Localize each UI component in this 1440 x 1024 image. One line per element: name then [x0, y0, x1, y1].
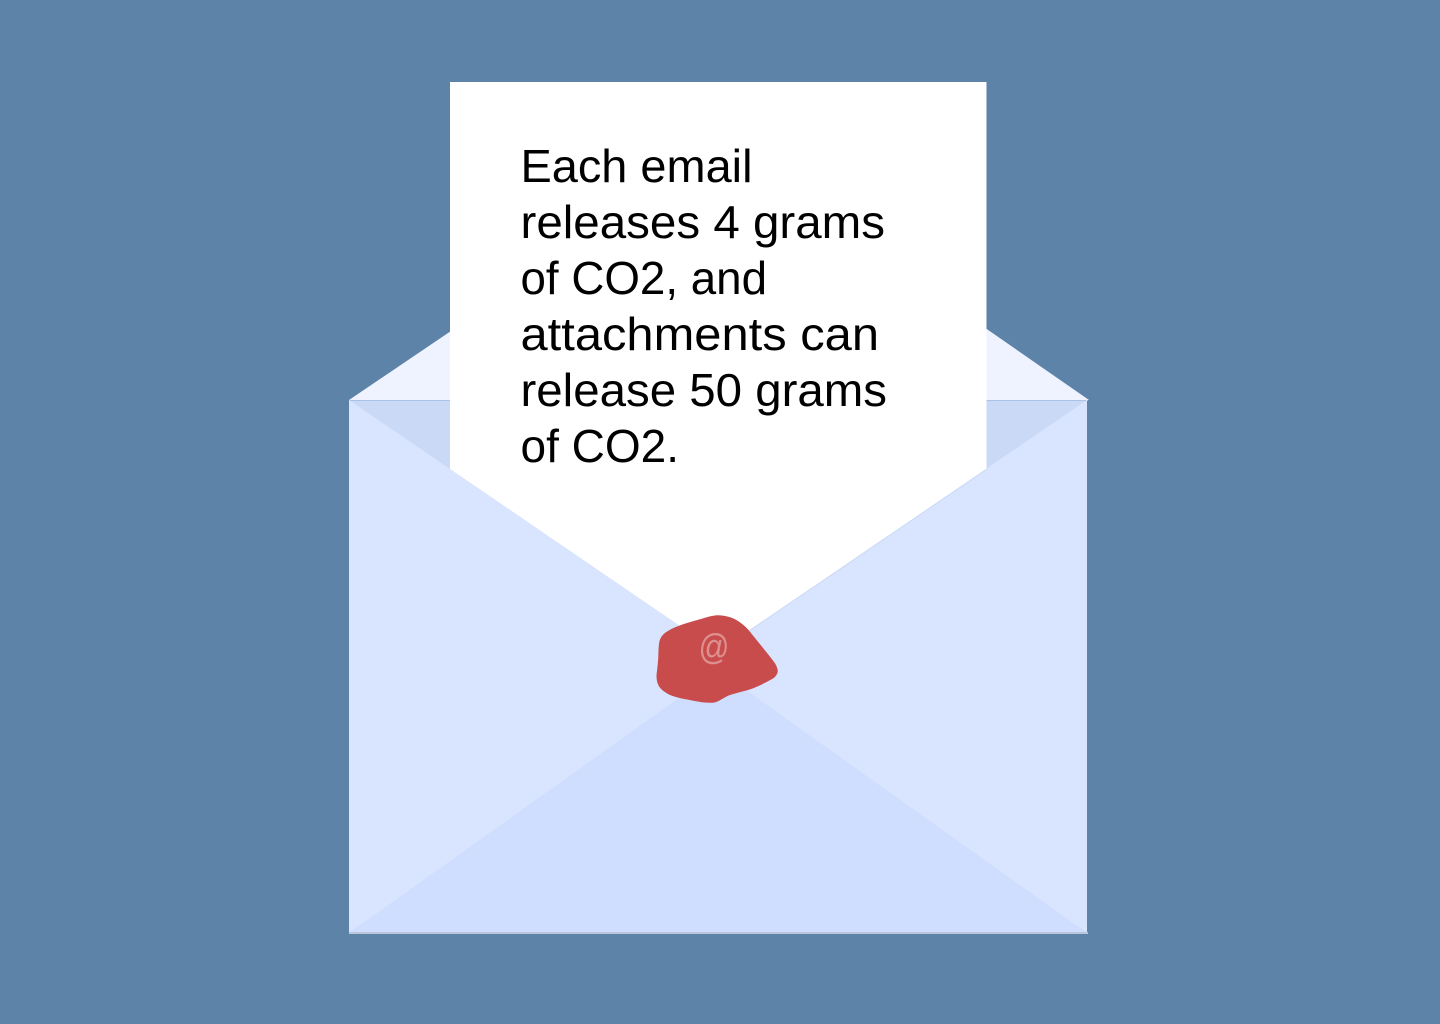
envelope left panel: [349, 400, 718, 933]
envelope bottom panel: [349, 670, 1087, 933]
flap fold line: [349, 400, 1088, 401]
letter text: of CO2, and: [520, 252, 767, 304]
letter paper: [450, 82, 986, 652]
letter text: release 50 grams: [520, 364, 887, 416]
at sign icon: @: [699, 628, 729, 668]
wax seal: [657, 615, 778, 703]
letter text: of CO2.: [520, 420, 679, 472]
letter text: releases 4 grams: [520, 196, 885, 248]
envelope open flap: [349, 328, 1089, 400]
seal blob: [657, 615, 778, 703]
letter text: attachments can: [520, 308, 879, 360]
envelope inner back: [349, 400, 1087, 680]
letter text: [520, 140, 887, 472]
envelope right panel: [718, 400, 1087, 933]
right panel edge: [718, 469, 987, 652]
letter text: Each email: [520, 140, 752, 192]
envelope bottom edge: [349, 932, 1088, 934]
